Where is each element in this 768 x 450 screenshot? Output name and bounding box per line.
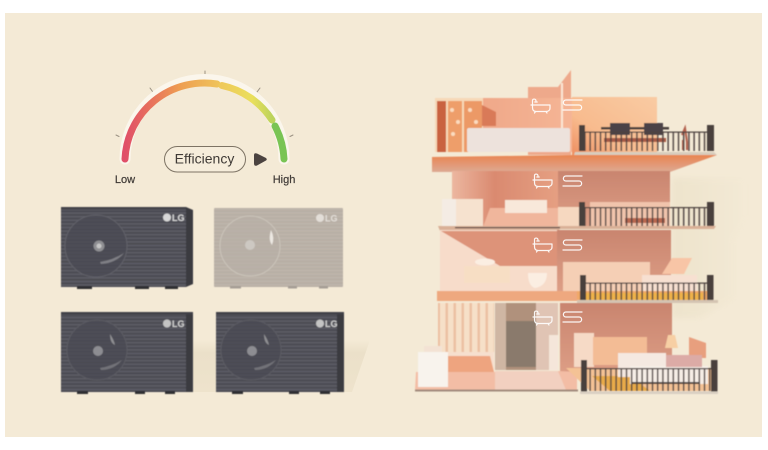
dresser xyxy=(593,337,647,365)
lamp xyxy=(665,335,678,348)
heating icons: second floor coil xyxy=(563,176,582,186)
bathroom lower wall xyxy=(483,208,558,227)
bed on top floor xyxy=(467,128,570,152)
heat pump unit: top left xyxy=(61,207,193,289)
heating icons: ground floor bath xyxy=(533,311,552,325)
bookcase xyxy=(435,98,496,152)
heat pump unit: top right, faded: LG xyxy=(325,214,338,224)
ground floor deck xyxy=(415,371,577,390)
second railing xyxy=(579,202,714,227)
gauge tick marks xyxy=(116,71,293,136)
gauge white outline xyxy=(125,80,284,159)
label: Low: Low xyxy=(115,174,135,186)
third railing xyxy=(580,275,714,301)
third floor xyxy=(437,230,718,303)
bedroom wall xyxy=(560,303,672,375)
second floor walls xyxy=(452,171,558,227)
heating icons: top floor coil xyxy=(563,100,582,110)
third floor slab xyxy=(577,300,718,303)
heating icons: second floor bath xyxy=(533,174,552,188)
icon: needle arrow xyxy=(254,153,267,166)
top floor tower wall xyxy=(528,70,571,155)
heat pump unit: bottom left xyxy=(61,312,193,394)
gauge segment: low to mid xyxy=(125,83,217,159)
ground slab xyxy=(415,390,578,392)
sofa xyxy=(590,202,670,227)
heat pump unit: bottom right: LG xyxy=(325,319,338,329)
heat pump unit: bottom left: LG xyxy=(172,319,184,329)
floor shadows behind units xyxy=(193,340,370,392)
second floor slab xyxy=(438,226,716,231)
white cabinet xyxy=(418,352,448,387)
third floor deck xyxy=(437,291,577,301)
heat pump unit: bottom right xyxy=(216,312,344,394)
label: High: High xyxy=(273,174,295,186)
towel rail on tower xyxy=(561,83,563,128)
bathtub xyxy=(442,199,483,226)
ground railing xyxy=(581,360,718,392)
bed xyxy=(618,353,708,384)
heating icons: third floor coil xyxy=(563,240,582,250)
top floor xyxy=(435,70,717,155)
heating icons: top floor bath xyxy=(531,99,550,113)
third floor right wall xyxy=(557,230,671,292)
vanity xyxy=(464,266,510,283)
third floor left wall xyxy=(440,230,557,292)
gauge segment: yellow xyxy=(222,86,272,120)
top slab xyxy=(432,155,717,172)
efficiency pill xyxy=(164,146,246,172)
top railing xyxy=(579,125,714,151)
sink xyxy=(505,200,547,213)
heating icons: ground floor coil xyxy=(563,312,582,322)
heating icons: third floor bath xyxy=(533,238,552,252)
second floor xyxy=(438,171,716,231)
heat pump unit: top right, faded xyxy=(214,208,343,288)
gauge segment: green xyxy=(275,126,284,159)
building shadow xyxy=(672,178,748,318)
glass shower xyxy=(495,303,558,370)
top balcony floor xyxy=(574,152,717,155)
toilet xyxy=(528,273,547,288)
slatted wall xyxy=(438,303,494,352)
efficiency pill: Efficiency xyxy=(175,150,234,166)
ground floor xyxy=(415,303,718,394)
top floor back walls xyxy=(436,98,572,152)
top floor dining set xyxy=(601,123,687,150)
headboard xyxy=(689,337,706,358)
building cross-section xyxy=(415,70,718,394)
gauge: efficiency meter xyxy=(115,71,295,186)
heat pump unit: top left: LG xyxy=(172,213,184,223)
sofa xyxy=(642,258,697,292)
